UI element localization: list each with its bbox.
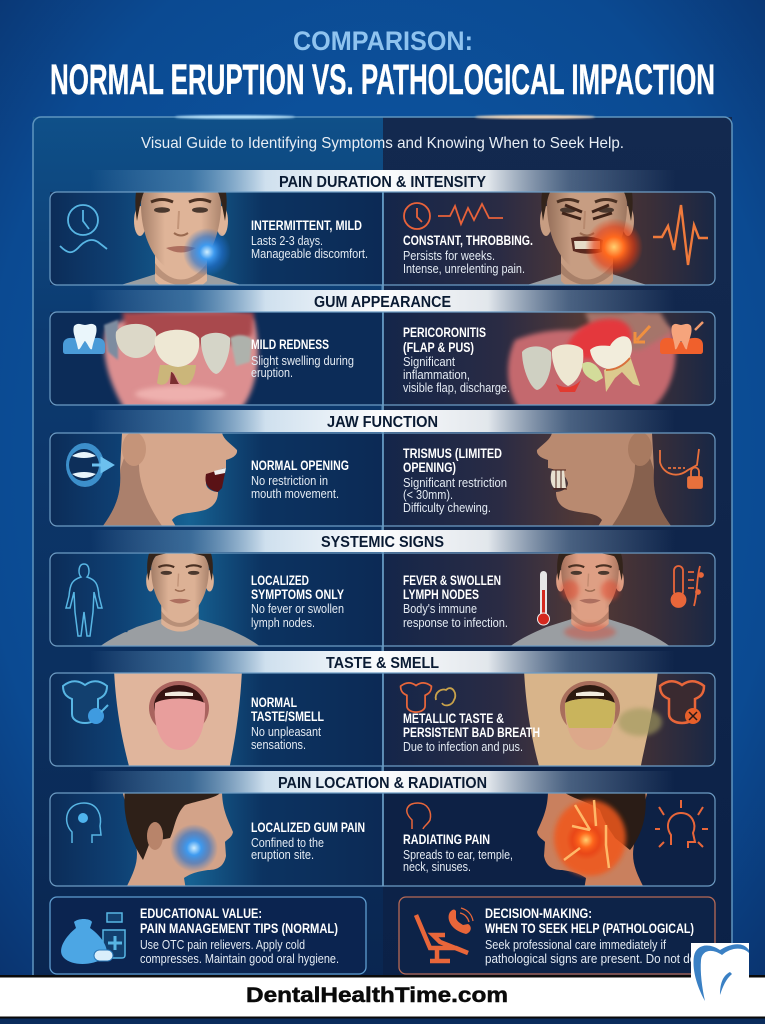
pathological card: [404, 794, 708, 886]
normal text: LOCALIZED: [251, 573, 309, 588]
normal text: eruption site.: [251, 847, 314, 862]
photo: inflamed gum and impacted tooth: [508, 312, 676, 410]
icon: tongue and breath: [401, 683, 455, 712]
normal text: No fever or swollen: [251, 601, 344, 616]
help text: WHEN TO SEEK HELP (PATHOLOGICAL): [485, 921, 694, 936]
pathological text: OPENING): [403, 460, 456, 475]
pathological text: Intense, unrelenting pain.: [403, 261, 525, 276]
icon: tongue with cross: [660, 681, 704, 724]
section: taste and smell: [50, 651, 715, 770]
pathological text: [403, 325, 510, 395]
normal card: [62, 674, 382, 766]
section heading: [90, 530, 675, 552]
pathological text: LYMPH NODES: [403, 587, 479, 602]
normal text: NORMAL: [251, 695, 297, 710]
normal card: [50, 311, 382, 410]
pathological text: Persists for weeks.: [403, 248, 495, 263]
section: gum appearance: [50, 290, 715, 410]
pathological text: response to infection.: [403, 615, 508, 630]
normal text: INTERMITTENT, MILD: [251, 218, 362, 233]
photo: healthy gum and teeth: [104, 311, 258, 410]
normal text: SYMPTOMS ONLY: [251, 587, 344, 602]
pathological text: PERSISTENT BAD BREATH: [403, 725, 540, 740]
normal text: No restriction in: [251, 473, 328, 488]
tips text: Use OTC pain relievers. Apply cold: [140, 937, 305, 952]
tips text: [140, 906, 339, 966]
normal text: [251, 337, 354, 380]
icon: head outline: [407, 803, 430, 829]
icon: dental chair and phone: [416, 908, 473, 961]
photo: calm face: [122, 192, 240, 284]
subtitle: Visual Guide to Identifying Symptoms and Knowing When to Seek Help.: [141, 135, 624, 152]
section heading: JAW FUNCTION: [327, 414, 438, 431]
section heading: GUM APPEARANCE: [314, 294, 451, 311]
normal text: Manageable discomfort.: [251, 246, 368, 261]
icon: locked jaw: [660, 449, 702, 488]
tips text: PAIN MANAGEMENT TIPS (NORMAL): [140, 921, 338, 936]
photo: open mouth profile: [100, 432, 237, 530]
icon: arrow to flap: [635, 326, 650, 342]
website name: DentalHealthTime.com: [246, 984, 508, 1007]
pathological card: [403, 312, 715, 405]
normal card: [50, 192, 382, 285]
pathological text: FEVER & SWOLLEN: [403, 573, 501, 588]
title kicker: COMPARISON:: [293, 26, 473, 56]
section heading: PAIN DURATION & INTENSITY: [279, 174, 486, 191]
pathological text: visible flap, discharge.: [403, 380, 510, 395]
section heading: [90, 410, 675, 432]
pathological card: [402, 433, 715, 526]
tips text: compresses. Maintain good oral hygiene.: [140, 951, 339, 966]
photo: pained face: [529, 192, 645, 284]
normal text: sensations.: [251, 737, 306, 752]
pathological text: RADIATING PAIN: [403, 832, 490, 847]
panel: pain management tips: [50, 897, 366, 974]
pathological text: Difficulty chewing.: [403, 500, 491, 515]
icon: healthy tooth: [63, 324, 105, 354]
help text: pathological signs are present. Do not delay: [485, 951, 711, 966]
pathological card: [396, 553, 715, 646]
photo: healthy tongue: [114, 670, 242, 770]
photo: clenched jaw profile: [537, 432, 674, 530]
icon: thermometer: [538, 571, 550, 625]
normal text: [251, 573, 344, 630]
pathological text: [403, 711, 540, 754]
normal text: lymph nodes.: [251, 615, 315, 630]
icon: tongue with check: [63, 681, 108, 724]
pathological text: CONSTANT, THROBBING.: [403, 233, 533, 248]
pathological text: Spreads to ear, temple,: [403, 847, 513, 862]
icon: fever and nodes: [672, 566, 703, 607]
tips text: EDUCATIONAL VALUE:: [140, 906, 262, 921]
pathological text: Due to infection and pus.: [403, 739, 523, 754]
pathological text: (< 30mm).: [403, 487, 453, 502]
section: pain location and radiation: [50, 771, 715, 890]
photo: side face with local glow: [122, 790, 233, 890]
section heading: PAIN LOCATION & RADIATION: [278, 775, 487, 792]
title block: [50, 26, 715, 104]
icon: body outline: [66, 564, 102, 636]
help text: Seek professional care immediately if: [485, 937, 666, 952]
pathological text: PERICORONITIS: [403, 325, 486, 340]
section heading: TASTE & SMELL: [326, 655, 439, 672]
icon: large pulse: [653, 205, 708, 265]
normal text: Confined to the: [251, 835, 324, 850]
pathological text: [403, 446, 507, 515]
normal text: Slight swelling during: [251, 353, 354, 368]
photo: healthy man: [101, 554, 259, 646]
normal card: [50, 553, 382, 646]
icon: open mouth: [66, 443, 112, 487]
icon: clock and pulse: [404, 203, 503, 229]
pathological text: Body's immune: [403, 601, 477, 616]
main panel: [33, 115, 732, 987]
normal text: Lasts 2-3 days.: [251, 233, 323, 248]
pathological text: [403, 832, 513, 874]
normal text: [251, 695, 324, 752]
logo: tooth: [691, 943, 749, 1001]
section heading: [90, 170, 675, 192]
pathological text: TRISMUS (LIMITED: [403, 446, 502, 461]
pathological text: neck, sinuses.: [403, 859, 471, 874]
pathological card: [403, 192, 715, 285]
normal text: [251, 218, 368, 261]
section: pain duration and intensity: [49, 170, 716, 286]
normal text: LOCALIZED GUM PAIN: [251, 820, 365, 835]
normal text: TASTE/SMELL: [251, 709, 324, 724]
icon: inflamed tooth: [660, 322, 703, 354]
normal text: MILD REDNESS: [251, 337, 329, 352]
pathological text: Significant: [403, 354, 455, 369]
photo: side face with radiating pain: [537, 790, 648, 890]
section: jaw function: [50, 410, 715, 530]
normal text: mouth movement.: [251, 486, 339, 501]
normal card: [50, 432, 382, 530]
section heading: [90, 651, 675, 673]
pathological text: inflammation,: [403, 367, 470, 382]
help text: DECISION-MAKING:: [485, 906, 592, 921]
panel: when to seek help: [399, 897, 715, 974]
normal text: [251, 820, 365, 862]
section heading: [90, 290, 675, 312]
icon: clock and wave: [60, 205, 107, 252]
normal text: No unpleasant: [251, 724, 321, 739]
photo: feverish man: [511, 554, 668, 646]
section heading: [90, 771, 675, 793]
help text: [485, 906, 711, 966]
normal text: [251, 458, 349, 501]
footer bar: [0, 975, 765, 1024]
icon: head with glow: [67, 803, 101, 843]
section: systemic signs: [50, 530, 715, 656]
pathological text: (FLAP & PUS): [403, 340, 474, 355]
icon: radiating arrows: [655, 800, 708, 848]
section heading: SYSTEMIC SIGNS: [321, 534, 444, 551]
pathological text: Significant restriction: [403, 475, 507, 490]
normal text: eruption.: [251, 365, 293, 380]
photo: coated tongue with bad breath: [524, 670, 662, 770]
normal card: [64, 794, 382, 886]
normal text: NORMAL OPENING: [251, 458, 349, 473]
pathological card: [384, 670, 715, 770]
pathological text: METALLIC TASTE &: [403, 711, 504, 726]
pathological text: [403, 573, 508, 630]
icon: ice bag and medicine: [61, 913, 125, 964]
pathological text: [403, 233, 533, 276]
